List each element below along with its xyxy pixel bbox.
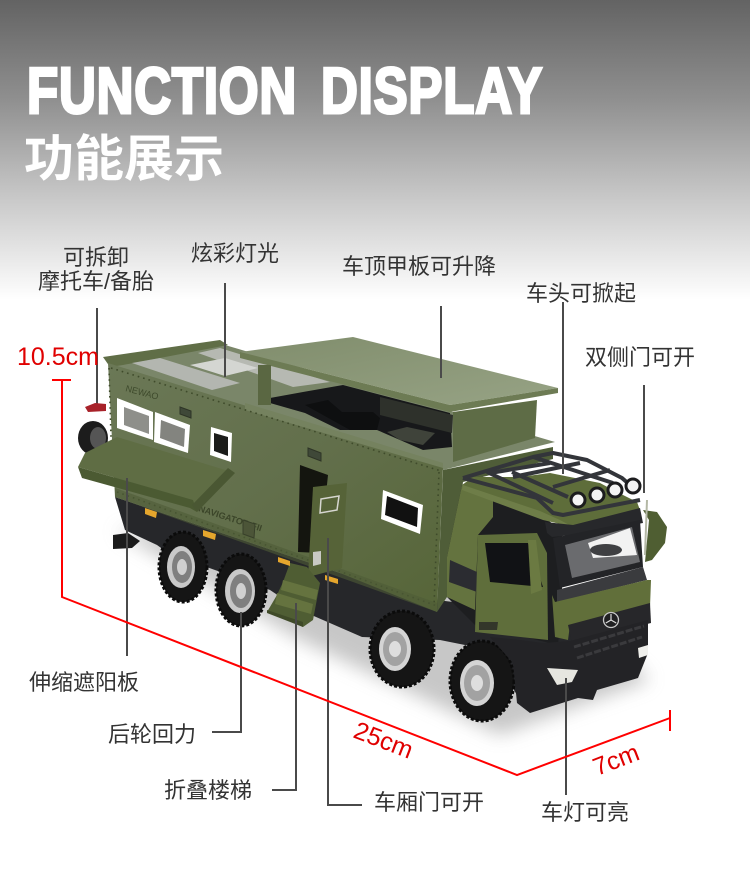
windshield frame <box>553 520 643 588</box>
label: 伸缩遮阳板: 伸缩遮阳板 <box>29 670 139 695</box>
rear step <box>113 533 140 549</box>
background gradient <box>0 0 750 300</box>
cab forehead highlight <box>462 485 573 527</box>
mercedes emblem <box>604 612 618 628</box>
window 3 <box>210 427 232 462</box>
callout line: lights <box>224 283 226 377</box>
solar panel 2 <box>198 348 330 387</box>
wheel 1 <box>159 532 207 602</box>
callout line: side doors <box>643 385 645 493</box>
dimension: 25cm: 25cm <box>350 716 417 765</box>
roof pole <box>258 365 271 405</box>
lower side trim <box>115 488 437 612</box>
label: 折叠楼梯: 折叠楼梯 <box>164 778 252 803</box>
box side wall <box>108 363 443 612</box>
title: FUNCTION DISPLAY: DISPLAY <box>321 54 543 127</box>
brand mark NEWAO: NEWAO <box>124 383 160 402</box>
roof rack <box>463 453 640 515</box>
label: 炫彩灯光: 炫彩灯光 <box>191 241 279 266</box>
title: FUNCTION DISPLAY: FUNCTION <box>27 54 297 127</box>
grille <box>568 603 651 643</box>
strip below windshield <box>557 567 647 602</box>
callout line: box door <box>328 538 362 805</box>
subtitle: 功能展示: 功能展示 <box>24 131 224 187</box>
callout line: motorcycle <box>96 308 98 405</box>
solar panel 1 <box>132 358 240 390</box>
shadow under truck <box>115 530 650 735</box>
cab roof <box>462 473 640 527</box>
box roof <box>110 345 555 470</box>
upper raised wall <box>453 400 537 462</box>
open cab door <box>475 533 548 640</box>
open box door <box>308 483 347 577</box>
dimension: 10.5cm: 10.5cm <box>17 343 99 371</box>
cab lower window <box>449 560 477 592</box>
callout line: cab tilts <box>562 302 564 474</box>
headlamp left <box>547 668 578 685</box>
motorcycle and spare tire <box>78 403 108 455</box>
front window <box>381 490 423 534</box>
roof interior <box>270 385 453 450</box>
vent plate <box>243 520 255 538</box>
label: 车顶甲板可升降: 车顶甲板可升降 <box>342 254 496 279</box>
side mirror <box>643 510 667 562</box>
wheel 3 <box>370 611 434 687</box>
folding stairs <box>267 563 320 627</box>
doorway <box>298 465 328 553</box>
marker lights <box>145 508 338 584</box>
callout line: awning <box>126 478 128 656</box>
brand mark NAVIGATOR: NAVIGATOR-FII <box>197 503 263 533</box>
label: 双侧门可开: 双侧门可开 <box>585 345 695 370</box>
label: 摩托车/备胎: 摩托车/备胎 <box>38 269 154 294</box>
awning <box>78 437 235 512</box>
windshield glass <box>565 527 640 578</box>
roof hatch <box>190 358 258 376</box>
label: 可拆卸: 可拆卸 <box>63 245 129 270</box>
callout line: roof deck <box>440 306 442 378</box>
bumper grille slots <box>574 626 644 658</box>
label: 车灯可亮: 车灯可亮 <box>541 800 629 825</box>
raised roof deck <box>240 337 558 412</box>
dimension lines <box>52 380 670 775</box>
callout line: headlamp <box>565 678 567 795</box>
mirror arm <box>645 500 647 555</box>
small vents <box>180 407 321 461</box>
label: 后轮回力: 后轮回力 <box>108 722 196 747</box>
rivet lines <box>109 368 441 606</box>
roof lights <box>571 479 640 507</box>
bumper <box>490 620 648 713</box>
wheel 4 <box>450 641 514 721</box>
wall top rim <box>245 403 443 468</box>
rear roof rail <box>103 340 228 367</box>
chassis <box>115 497 580 700</box>
truck <box>78 337 667 721</box>
cab front panel <box>552 580 651 640</box>
dimension: 7cm: 7cm <box>589 739 643 782</box>
black band above windshield <box>545 508 643 537</box>
label: 车头可掀起: 车头可掀起 <box>526 281 636 306</box>
wheel 2 <box>216 554 266 626</box>
callout line: rear wheel <box>212 612 241 732</box>
window 1 <box>117 398 153 440</box>
cab side panel <box>447 485 493 610</box>
front box wall <box>437 447 553 612</box>
callout line: stairs <box>272 603 296 790</box>
label: 车厢门可开: 车厢门可开 <box>374 790 484 815</box>
headlamp right <box>638 645 648 658</box>
window 2 <box>154 412 190 453</box>
title: FUNCTION DISPLAY <box>27 54 543 127</box>
cab body underlay <box>447 485 562 645</box>
